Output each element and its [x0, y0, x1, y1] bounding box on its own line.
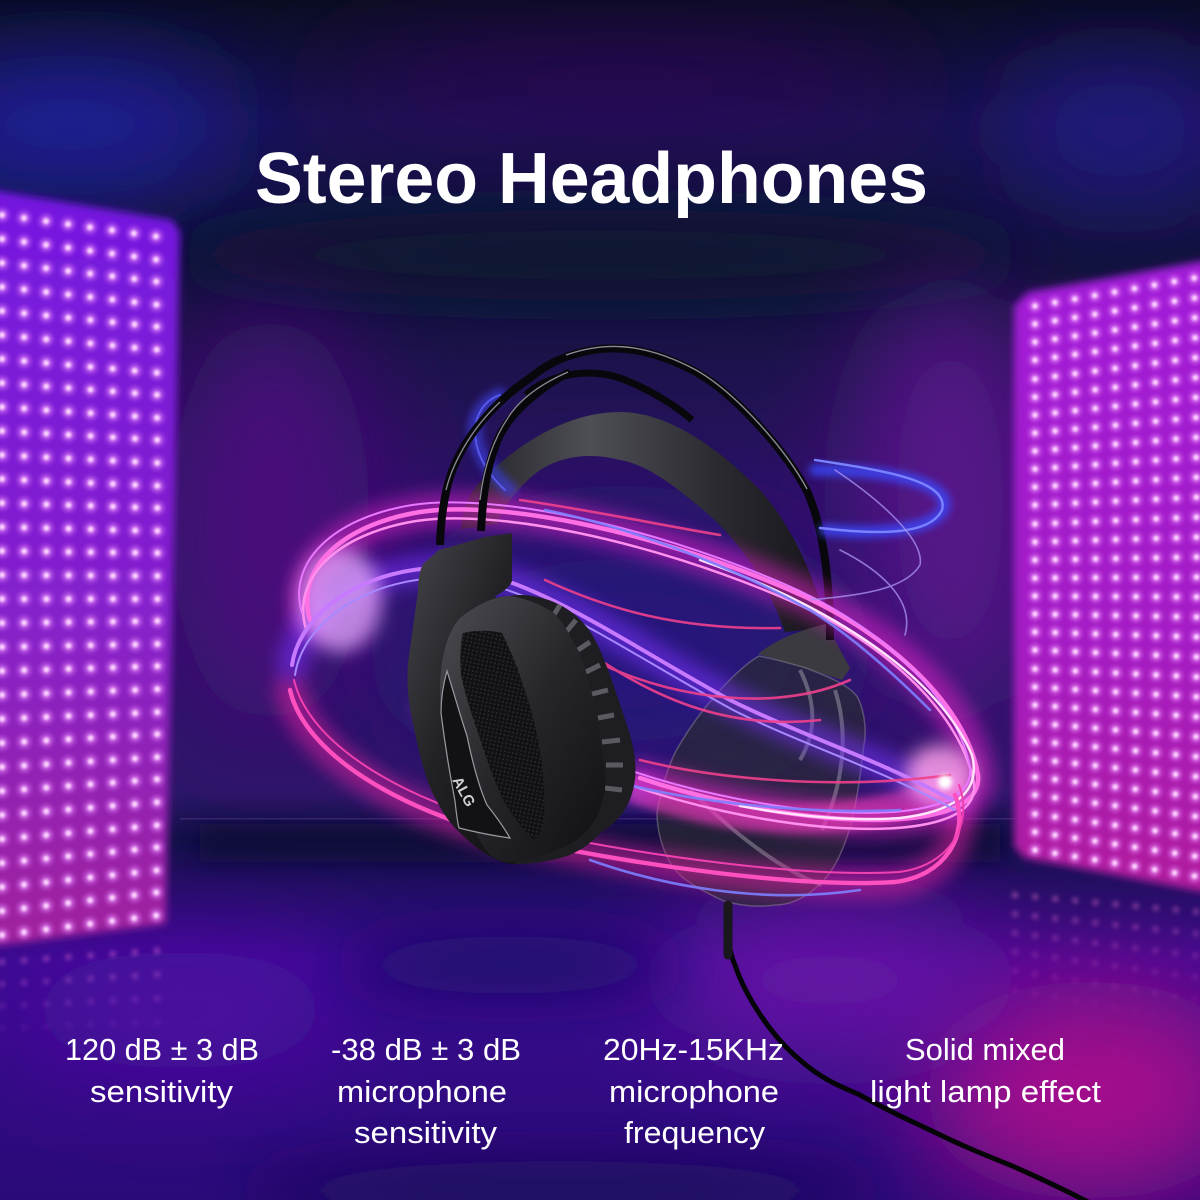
headphones: far side, headband and far ear cup — [461, 346, 865, 906]
cable — [728, 905, 1092, 1200]
icon: right wire — [566, 348, 830, 640]
upper ring inner strand — [299, 502, 970, 813]
lilac swirl right — [810, 470, 920, 635]
feature: sensitivity: sensitivity — [90, 1074, 234, 1109]
panel: left LED wall — [0, 188, 180, 948]
ring blue streak — [545, 510, 930, 895]
feature: lamp effect: Solid mixed — [905, 1032, 1065, 1067]
feature: microphone frequency: microphone — [609, 1074, 779, 1109]
headphones: near ear cup and wires — [407, 357, 635, 864]
panel: right LED wall — [1014, 258, 1200, 895]
icon: logo plate — [441, 671, 510, 838]
lower ring strand — [294, 680, 963, 873]
icon: far hinge block — [758, 624, 850, 680]
feature: sensitivity — [65, 1032, 259, 1109]
upper ring parallel strand — [303, 518, 974, 829]
feature: microphone frequency — [603, 1032, 784, 1150]
feature: microphone sensitivity — [331, 1032, 521, 1150]
feature: microphone sensitivity: sensitivity — [354, 1115, 498, 1150]
icon: far wire highlight — [566, 346, 807, 489]
blue swirl left — [475, 395, 505, 490]
icon: cushion ridges — [552, 605, 623, 790]
lower pink ring — [290, 690, 959, 883]
icon: second rear wire — [526, 373, 692, 420]
icon: wire highlight — [446, 372, 568, 500]
secondary ring strand — [295, 578, 955, 810]
feature: sensitivity: 120 dB ± 3 dB — [65, 1032, 259, 1067]
icon: shell — [407, 533, 534, 864]
icon: ALG logo: ALG — [448, 774, 478, 810]
icon: left outer wire — [440, 357, 566, 545]
panel: left wall floor reflection — [2, 950, 167, 1050]
feature: lamp effect — [870, 1032, 1101, 1109]
feature: microphone frequency: 20Hz-15KHz — [603, 1032, 784, 1067]
light rings: bright strands — [290, 395, 978, 895]
icon: cushion — [500, 595, 635, 864]
icon: far ear cushion — [657, 656, 865, 906]
title: Stereo Headphones — [255, 139, 928, 219]
feature: microphone frequency: frequency — [624, 1115, 766, 1150]
ring middle magenta streak — [520, 500, 950, 782]
upper ring white core — [700, 560, 974, 819]
feature: microphone sensitivity: -38 dB ± 3 dB — [331, 1032, 521, 1067]
icon: far cushion inner fold — [690, 670, 843, 885]
upper pink ring — [307, 509, 978, 820]
flare right — [938, 775, 952, 789]
blue swirl right — [815, 460, 943, 532]
light rings: soft glow — [290, 395, 978, 883]
icon: speaker mesh — [460, 631, 544, 840]
feature: lamp effect: light lamp effect — [870, 1074, 1101, 1109]
icon: headband — [461, 412, 828, 632]
icon: cup face — [440, 596, 605, 863]
secondary ring lilac — [292, 568, 952, 800]
feature: microphone sensitivity: microphone — [337, 1074, 507, 1109]
panel: right wall floor reflection — [1015, 895, 1200, 1022]
icon: left inner wire — [481, 372, 570, 531]
